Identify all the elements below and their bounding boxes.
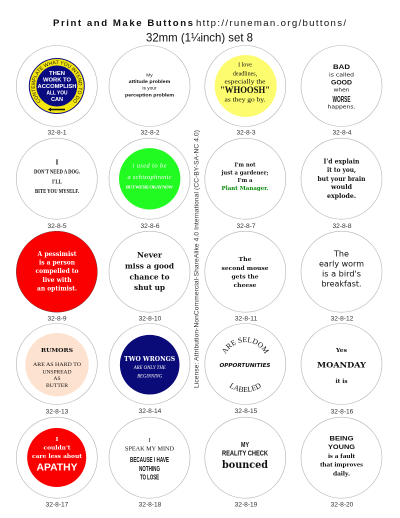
caption 32-8-5: 32-8-5: [47, 223, 67, 230]
button 32-8-20: BEING: [330, 436, 354, 443]
button 32-8-10: miss a good: [125, 261, 175, 270]
button 32-8-9: A pessimist: [36, 251, 77, 258]
button 32-8-3: as they go by.: [224, 97, 266, 103]
button 32-8-9: an optimist.: [37, 285, 77, 292]
button 32-8-2: is your: [142, 86, 157, 92]
button 32-8-3: "WHOOSH": [220, 85, 270, 96]
button 32-8-8: it to you,: [327, 167, 356, 174]
button 32-8-4: BAD: [333, 65, 351, 71]
button 32-8-17: care less about: [32, 454, 82, 460]
button 32-8-20: daily.: [333, 471, 351, 477]
caption 32-8-13: 32-8-13: [46, 408, 69, 416]
button 32-8-7: I'm a: [238, 178, 253, 184]
button 32-8-18: BECAUSE I HAVE: [130, 457, 169, 464]
button 32-8-2: attitude problem: [129, 79, 170, 85]
button 32-8-5: DON'T NEED A DOG.: [34, 169, 80, 175]
title: Print and Make Buttons: [53, 18, 193, 29]
button 32-8-15: OPPORTUNITIES: [220, 363, 271, 369]
button 32-8-14: [109, 324, 190, 404]
title: http://runeman.org/buttons/: [196, 18, 346, 29]
button 32-8-4: when: [334, 88, 350, 94]
button 32-8-1: ALL YOU: [46, 90, 68, 96]
button 32-8-14: TWO WRONGS: [124, 356, 175, 363]
caption 32-8-9: 32-8-9: [47, 316, 67, 322]
caption 32-8-12: 32-8-12: [331, 316, 354, 322]
button 32-8-1: WORK TO: [43, 77, 71, 83]
button 32-8-3: deadlines,: [233, 71, 258, 77]
button 32-8-4: is called: [329, 73, 354, 79]
button 32-8-8: would: [330, 184, 353, 191]
button 32-8-18: I: [148, 438, 150, 444]
caption 32-8-20: 32-8-20: [331, 502, 354, 508]
button 32-8-14: ARE ONLY THE: [133, 366, 166, 371]
button 32-8-6: BUT WE'RE OKAY NOW: [126, 184, 173, 189]
button 32-8-12: early worm: [319, 260, 364, 269]
button 32-8-12: breakfast.: [322, 280, 362, 289]
caption 32-8-6: 32-8-6: [140, 223, 160, 230]
button 32-8-15: ARE SELDOM: [222, 337, 269, 354]
button 32-8-9: compelled to: [36, 268, 78, 275]
button 32-8-20: that improves: [320, 463, 364, 469]
button 32-8-12: The: [333, 250, 349, 259]
button 32-8-12: [301, 231, 382, 312]
button 32-8-8: I'd explain: [324, 158, 360, 166]
button 32-8-6: a schizophrenic: [128, 174, 172, 181]
button 32-8-6: i used to be: [132, 163, 167, 170]
button 32-8-11: [205, 231, 286, 312]
caption 32-8-10: 32-8-10: [139, 316, 162, 322]
button 32-8-3: especially the: [224, 80, 266, 86]
button 32-8-16: Yes: [335, 348, 347, 354]
button 32-8-10: [109, 231, 190, 312]
button 32-8-9: live with: [42, 277, 72, 284]
button 32-8-11: second mouse: [222, 266, 269, 272]
caption 32-8-15: 32-8-15: [235, 408, 258, 415]
title: 32mm (1¼inch) set 8: [146, 31, 253, 45]
button 32-8-9: is a person: [39, 259, 76, 266]
button 32-8-2: perception problem: [125, 92, 174, 98]
button 32-8-13: BUTTER: [46, 383, 68, 389]
button 32-8-13: ARE AS HARD TO: [33, 362, 81, 368]
button 32-8-8: [301, 138, 382, 219]
button 32-8-11: gets the: [232, 275, 259, 281]
button 32-8-15: [204, 323, 286, 405]
button 32-8-16: MOANDAY: [317, 360, 367, 369]
button 32-8-3: [205, 46, 286, 126]
button 32-8-4: [301, 46, 382, 126]
button 32-8-4: happens.: [328, 105, 356, 111]
button 32-8-13: RUMORS: [41, 348, 73, 354]
button 32-8-13: AS: [54, 376, 60, 382]
button 32-8-18: SPEAK MY MIND: [125, 446, 175, 452]
button 32-8-15: LABELED: [229, 382, 261, 392]
button 32-8-10: chance to: [130, 272, 170, 281]
button 32-8-14: BEGINNING: [137, 374, 163, 379]
button 32-8-2: [109, 46, 190, 126]
caption 32-8-8: 32-8-8: [332, 223, 352, 230]
button 32-8-1: CONTEMPLATE WHAT YOU INTEND TO DO: [31, 60, 82, 103]
button 32-8-10: Never: [137, 251, 163, 260]
button 32-8-18: NOTHING: [139, 466, 160, 473]
button 32-8-18: [109, 417, 190, 498]
button 32-8-7: [205, 138, 286, 219]
caption 32-8-14: 32-8-14: [139, 408, 162, 415]
button 32-8-20: [301, 417, 382, 498]
caption 32-8-1: 32-8-1: [47, 129, 67, 136]
button 32-8-13: [16, 324, 97, 404]
button 32-8-12: is a bird's: [322, 270, 361, 279]
caption 32-8-18: 32-8-18: [139, 502, 162, 508]
caption 32-8-11: 32-8-11: [235, 316, 257, 322]
button 32-8-11: The: [238, 257, 252, 263]
caption 32-8-7: 32-8-7: [236, 223, 256, 230]
title: [53, 18, 346, 45]
button 32-8-1: THEN: [49, 71, 65, 77]
button 32-8-4: WORSE: [332, 95, 351, 104]
caption 32-8-4: 32-8-4: [332, 129, 352, 136]
button 32-8-10: shut up: [134, 283, 165, 292]
button 32-8-8: but your brain: [318, 176, 366, 183]
caption 32-8-17: 32-8-17: [46, 502, 69, 508]
button 32-8-17: [16, 417, 97, 498]
button 32-8-7: I'm not: [234, 163, 256, 169]
caption 32-8-19: 32-8-19: [235, 502, 258, 508]
button 32-8-5: I: [56, 158, 59, 166]
button 32-8-1: ACCOMPLISH: [38, 84, 77, 90]
button 32-8-2: My: [146, 73, 153, 79]
button 32-8-19: bounced: [222, 459, 269, 471]
button 32-8-19: [205, 417, 286, 498]
button 32-8-6: [109, 138, 190, 219]
license text: License: Attribution-NonCommercial-ShareAlike 4.0 International (CC-BY-SA-NC 4.0): [194, 130, 200, 388]
button 32-8-17: I: [56, 437, 59, 443]
button 32-8-7: Plant Manager.: [222, 186, 269, 192]
button 32-8-3: I love: [238, 63, 252, 69]
button 32-8-5: BITE YOU MYSELF.: [35, 189, 79, 195]
button 32-8-4: GOOD: [331, 80, 353, 86]
caption 32-8-3: 32-8-3: [236, 129, 256, 136]
button 32-8-16: it is: [336, 379, 348, 385]
button 32-8-17: APATHY: [36, 462, 78, 473]
button 32-8-7: just a gardener;: [221, 171, 268, 177]
button 32-8-9: [16, 231, 97, 312]
button 32-8-5: [16, 138, 97, 219]
button 32-8-17: couldn't: [44, 446, 71, 452]
button 32-8-1: [16, 45, 98, 127]
button 32-8-8: explode.: [327, 193, 356, 200]
button 32-8-18: TO LOSE: [140, 475, 159, 482]
button 32-8-16: [301, 324, 382, 404]
button 32-8-19: REALITY CHECK: [222, 448, 268, 458]
button 32-8-13: UNSPREAD: [42, 370, 72, 376]
button 32-8-19: MY: [241, 440, 249, 449]
caption 32-8-2: 32-8-2: [140, 129, 160, 136]
button 32-8-1: CAN: [51, 97, 63, 103]
button 32-8-20: is a fault: [328, 454, 355, 460]
button 32-8-5: I'LL: [52, 178, 63, 185]
button 32-8-11: cheese: [234, 283, 257, 289]
caption 32-8-16: 32-8-16: [331, 408, 354, 416]
button 32-8-20: YOUNG: [328, 444, 355, 451]
